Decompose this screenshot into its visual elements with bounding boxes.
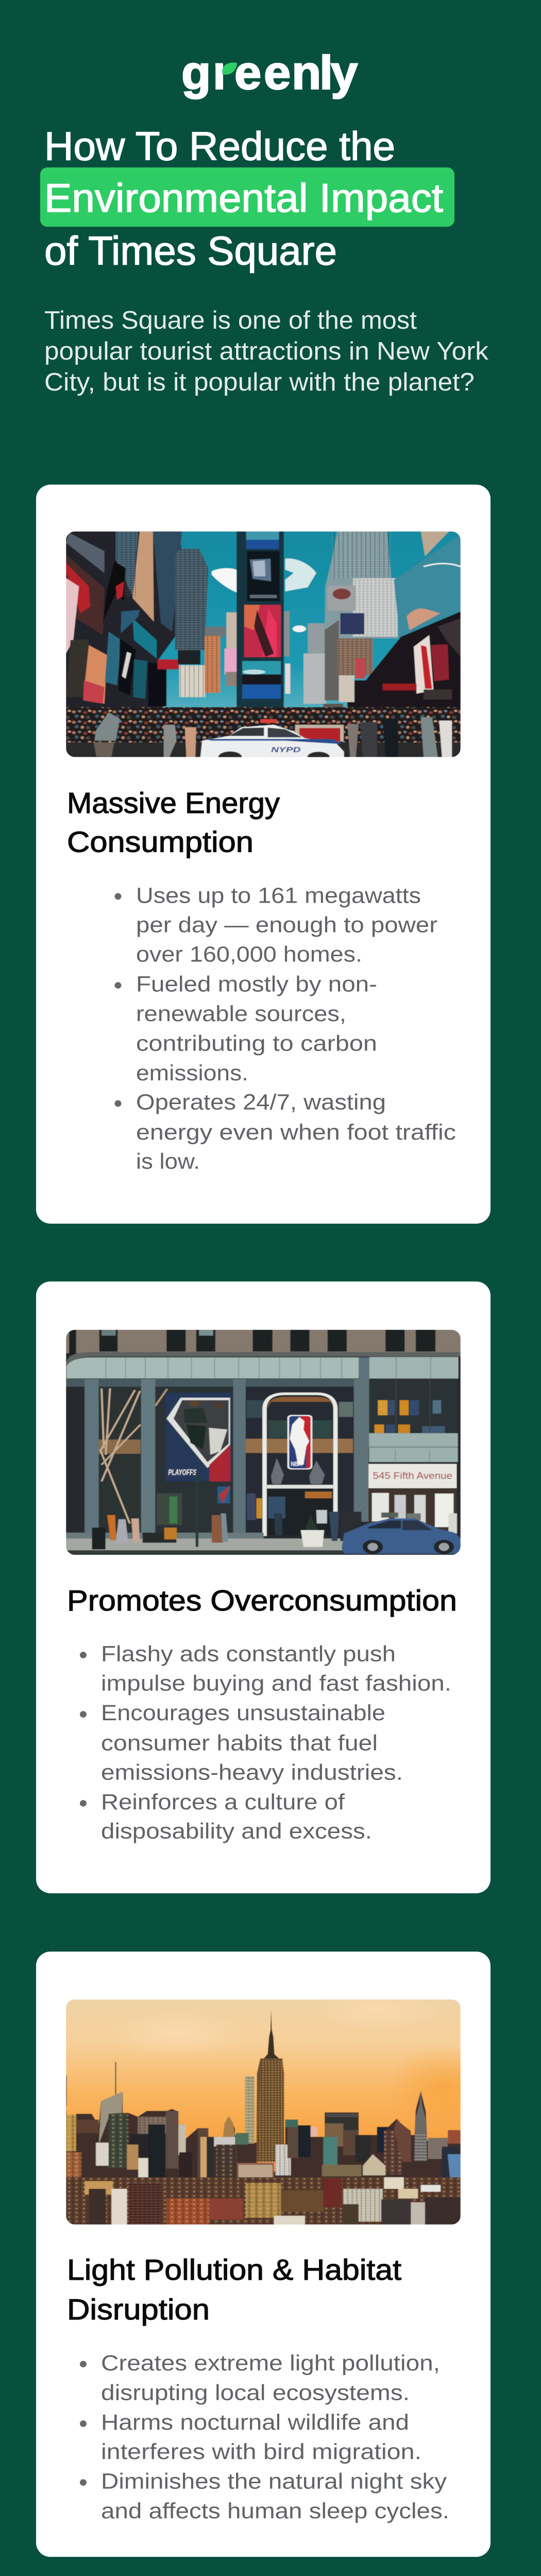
photo: Manhattan skyline at sunset bbox=[66, 1999, 461, 2225]
title: Environmental Impact bbox=[44, 175, 443, 221]
bullet list: Fueled mostly by non- bbox=[136, 972, 377, 996]
bullet list: Operates 24/7, wasting bbox=[136, 1090, 386, 1114]
bullet list bbox=[80, 1642, 451, 1843]
title: How To Reduce the bbox=[44, 123, 395, 168]
panel: light pollution and habitat disruption bbox=[36, 1952, 491, 2557]
icon: leaf bbox=[222, 62, 237, 75]
panel: promotes overconsumption bbox=[36, 1281, 491, 1893]
heading: Massive Energy bbox=[67, 787, 280, 820]
heading: Promotes Overconsumption bbox=[67, 1585, 457, 1617]
logo: greenly bbox=[181, 46, 358, 99]
title bbox=[40, 123, 454, 273]
bullet list: per day — enough to power bbox=[136, 913, 437, 937]
bullet list: Reinforces a culture of bbox=[101, 1790, 345, 1815]
bullet list: interferes with bird migration. bbox=[101, 2440, 421, 2464]
intro paragraph: popular tourist attractions in New York bbox=[44, 337, 488, 365]
title highlight bbox=[40, 167, 454, 227]
logo: greenly: gr bbox=[181, 46, 232, 99]
bullet list: energy even when foot traffic bbox=[136, 1121, 456, 1145]
bullet list: and affects human sleep cycles. bbox=[101, 2499, 449, 2523]
bullet list: Creates extreme light pollution, bbox=[101, 2351, 440, 2376]
intro paragraph: City, but is it popular with the planet? bbox=[44, 368, 475, 396]
bullet list bbox=[114, 884, 456, 1174]
photo: NBA store front bbox=[66, 1330, 461, 1555]
intro paragraph bbox=[44, 307, 488, 396]
bullet list: over 160,000 homes. bbox=[136, 942, 362, 967]
bullet list: contributing to carbon bbox=[136, 1031, 377, 1056]
photo: Times Square street bbox=[66, 531, 461, 763]
bullet list: Flashy ads constantly push bbox=[101, 1642, 396, 1666]
bullet list: disrupting local ecosystems. bbox=[101, 2381, 410, 2405]
bullet list: Uses up to 161 megawatts bbox=[136, 884, 421, 908]
intro paragraph: Times Square is one of the most bbox=[44, 307, 417, 334]
heading bbox=[67, 787, 280, 858]
bullet list: Harms nocturnal wildlife and bbox=[101, 2411, 409, 2435]
photo: NBA store front: PLAYOFFS bbox=[168, 1468, 197, 1477]
heading: Light Pollution & Habitat bbox=[67, 2254, 401, 2286]
bullet list: emissions-heavy industries. bbox=[101, 1760, 403, 1785]
bullet list: Diminishes the natural night sky bbox=[101, 2469, 447, 2494]
bullet list: Encourages unsustainable bbox=[101, 1701, 385, 1725]
title: of Times Square bbox=[44, 228, 337, 273]
bullet list: disposability and excess. bbox=[101, 1819, 372, 1843]
photo: Times Square street: NYPD bbox=[271, 746, 301, 754]
header: logo, title and intro bbox=[40, 46, 488, 396]
bullet list bbox=[80, 2351, 449, 2523]
bullet list: is low. bbox=[136, 1149, 200, 1174]
bullet list: renewable sources, bbox=[136, 1002, 346, 1026]
heading: Disruption bbox=[67, 2293, 210, 2326]
bullet list: consumer habits that fuel bbox=[101, 1731, 378, 1756]
bullet list: emissions. bbox=[136, 1061, 248, 1086]
heading: Consumption bbox=[67, 826, 253, 858]
photo: NBA store front: NBA bbox=[291, 1460, 302, 1468]
panel: massive energy consumption bbox=[36, 485, 491, 1224]
bullet list: impulse buying and fast fashion. bbox=[101, 1671, 451, 1696]
heading bbox=[67, 2254, 401, 2326]
logo: greenly: eenly bbox=[234, 46, 358, 99]
